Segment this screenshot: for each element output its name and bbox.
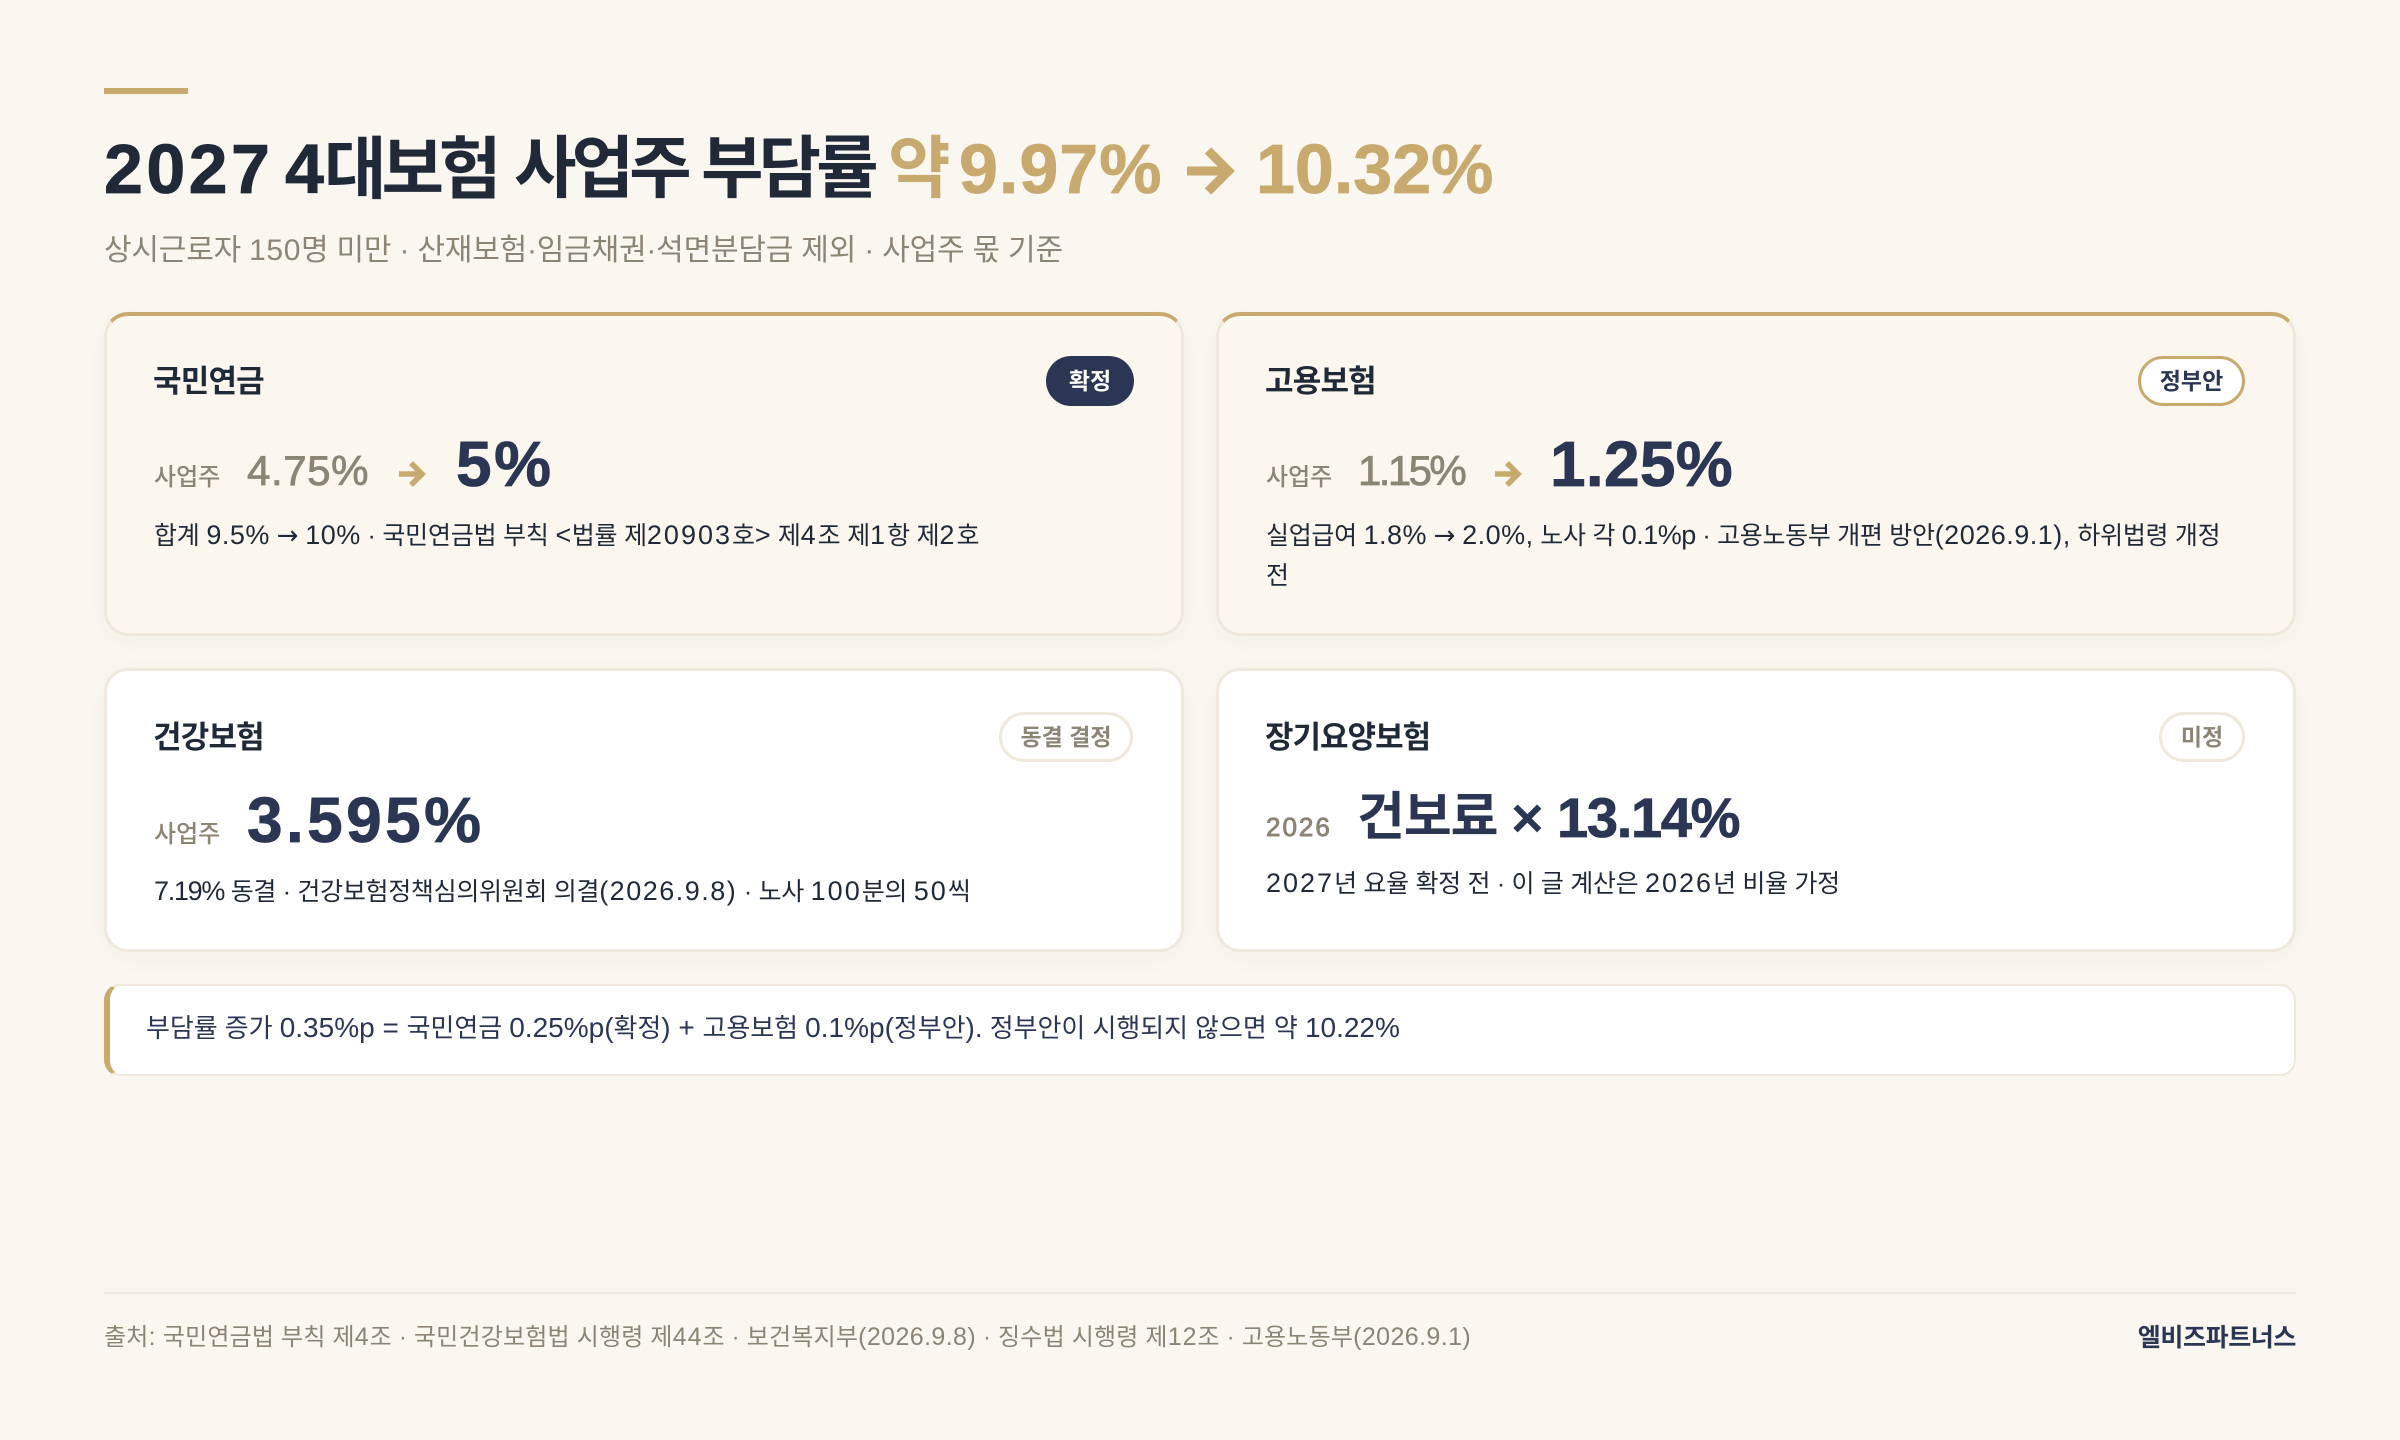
panel: national pension bbox=[104, 312, 1184, 636]
label: 사업주 bbox=[154, 821, 220, 848]
title: 약 bbox=[888, 131, 946, 207]
heading: national pension: 국민연금 bbox=[153, 364, 264, 399]
badge: confirmed bbox=[1046, 356, 1134, 406]
badge: undecided: 미정 bbox=[2181, 724, 2223, 750]
heading: long-term care insurance: 장기요양보험 bbox=[1265, 720, 1430, 755]
description: national pension: 합계 9.5% → 10% · 국민연금법 부칙 <법률 제20903호> 제4조 제1항 제2호 bbox=[154, 520, 979, 551]
old value: 1.15% bbox=[1358, 447, 1464, 494]
panel: employment insurance bbox=[1216, 312, 2296, 636]
panel: long-term care insurance bbox=[1216, 668, 2296, 952]
heading: health insurance: 건강보험 bbox=[153, 720, 264, 755]
callout: burden increase note bbox=[104, 984, 2296, 1076]
title: 사업주 bbox=[514, 131, 687, 207]
rate: national pension bbox=[154, 428, 554, 500]
title: 4대보험 bbox=[285, 130, 497, 208]
description: employment insurance: 실업급여 1.8% → 2.0%, 노사 각 0.1%p · 고용노동부 개편 방안(2026.9.1), 하위법령 개정 bbox=[1266, 520, 2220, 551]
badge: government proposal: 정부안 bbox=[2160, 368, 2223, 394]
badge: government proposal bbox=[2138, 356, 2245, 406]
title: 부담률 bbox=[701, 131, 874, 207]
rate: employment insurance bbox=[1266, 428, 1733, 500]
title: 10.32% bbox=[1256, 130, 1493, 208]
badge: freeze decision bbox=[999, 712, 1133, 762]
footer rule bbox=[104, 1292, 2296, 1294]
accent bar bbox=[104, 88, 188, 94]
badge: confirmed: 확정 bbox=[1069, 368, 1111, 394]
label: 2026 bbox=[1266, 812, 1332, 842]
title: 2027 bbox=[104, 130, 273, 208]
description: health insurance: 7.19% 동결 · 건강보험정책심의위원회 의결(2026.9.8) · 노사 100분의 50씩 bbox=[154, 876, 971, 906]
heading: employment insurance: 고용보험 bbox=[1265, 364, 1376, 399]
arrow bbox=[1495, 461, 1522, 487]
source text: 출처: 국민연금법 부칙 제4조 · 국민건강보험법 시행령 제44조 · 보건복지부(2026.9.8) · 징수법 시행령 제12조 · 고용노동부(2026.9.1) bbox=[104, 1323, 1471, 1351]
description: long-term care insurance: 2027년 요율 확정 전 · 이 글 계산은 2026년 비율 가정 bbox=[1266, 868, 1840, 898]
label: 사업주 bbox=[1266, 464, 1332, 491]
arrow bbox=[399, 461, 426, 487]
subtitle: 상시근로자 150명 미만 · 산재보험·임금채권·석면분담금 제외 · 사업주 몫 기준 bbox=[104, 234, 1063, 267]
rate: health insurance bbox=[154, 784, 484, 856]
title bbox=[104, 130, 1493, 208]
rate: long-term care insurance bbox=[1266, 786, 1740, 849]
value: × bbox=[1511, 786, 1544, 849]
badge: freeze decision: 동결 결정 bbox=[1020, 724, 1112, 750]
new value: 5% bbox=[456, 428, 554, 500]
description: employment insurance: 전 bbox=[1266, 562, 1289, 590]
label: 사업주 bbox=[154, 464, 220, 491]
value: 3.595% bbox=[247, 784, 484, 856]
callout text: 부담률 증가 0.35%p = 국민연금 0.25%p(확정) + 고용보험 0.1%p(정부안). 정부안이 시행되지 않으면 약 10.22% bbox=[146, 1012, 1400, 1043]
panel: health insurance bbox=[104, 668, 1184, 952]
new value: 1.25% bbox=[1550, 428, 1733, 500]
title: 9.97% bbox=[959, 130, 1162, 208]
brand: 엘비즈파트너스 bbox=[2138, 1324, 2296, 1352]
value bbox=[1357, 786, 1740, 849]
old value: 4.75% bbox=[247, 447, 369, 494]
badge: undecided bbox=[2159, 712, 2245, 762]
value: 13.14% bbox=[1557, 786, 1739, 849]
value: 건보료 bbox=[1357, 789, 1498, 847]
description: employment insurance bbox=[1266, 520, 2220, 590]
